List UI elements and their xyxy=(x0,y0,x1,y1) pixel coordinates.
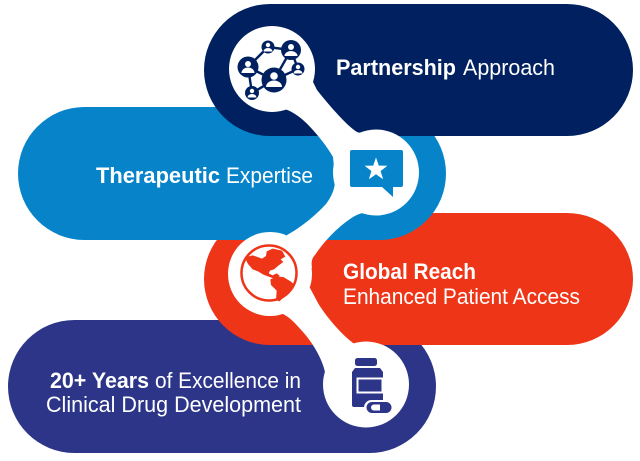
text: 20+ years: 20+ Years xyxy=(50,368,149,393)
panel: partnership approach xyxy=(204,4,633,136)
panel: global reach xyxy=(204,213,633,345)
text: therapeutic expertise: Expertise xyxy=(226,163,313,188)
panel: 20+ years xyxy=(8,320,436,453)
text: 20+ years: Clinical Drug Development xyxy=(46,392,301,417)
panel: therapeutic expertise xyxy=(18,107,446,240)
text: partnership approach: Partnership xyxy=(336,55,456,80)
icon: people network xyxy=(238,40,304,100)
text: global reach: Enhanced Patient Access xyxy=(343,284,580,309)
icon: globe xyxy=(242,246,296,301)
text: therapeutic expertise: Therapeutic xyxy=(96,163,220,188)
text: 20+ years xyxy=(46,368,301,417)
icon: speech bubble star xyxy=(350,150,403,197)
text: partnership approach: Approach xyxy=(463,55,555,80)
text: global reach xyxy=(343,259,580,309)
connector xyxy=(228,26,419,428)
text: 20+ years: of Excellence in xyxy=(155,368,301,393)
icon: medicine bottle xyxy=(352,358,394,415)
text: global reach: Global Reach xyxy=(343,259,476,284)
